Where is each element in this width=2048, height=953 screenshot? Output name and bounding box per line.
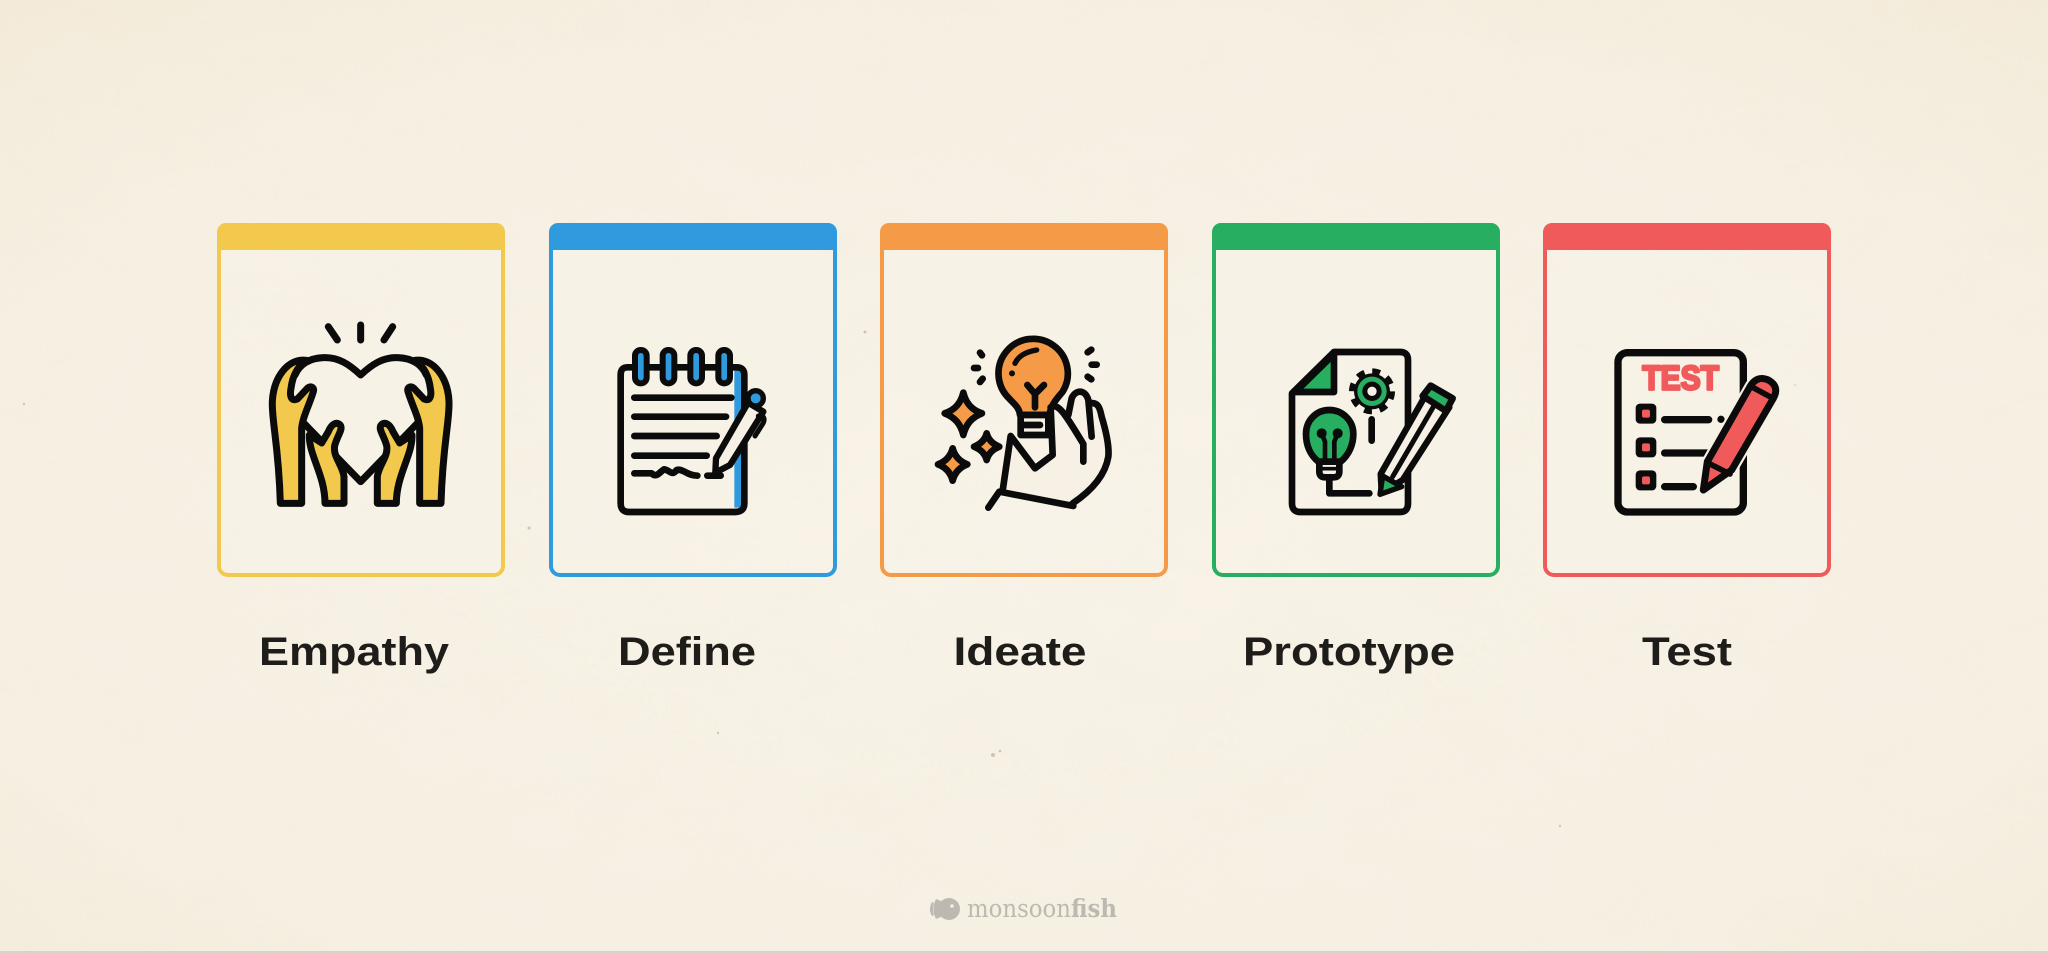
- icon: test checklist and pencil: TEST: [1642, 360, 1719, 398]
- Test card frame: [1545, 225, 1829, 575]
- icon: hand holding light bulb: [938, 339, 1109, 508]
- label: Define: Define: [618, 630, 756, 674]
- icon: notepad and pen: [621, 350, 764, 512]
- panel: Empathy: [217, 223, 505, 674]
- panel: Test: [1543, 223, 1831, 674]
- logo: monsoonfish: [930, 894, 1117, 923]
- Prototype card header: [1212, 223, 1500, 250]
- label: Empathy: Empathy: [259, 630, 450, 674]
- wordmark: monsoonfish: [967, 894, 1117, 923]
- Prototype card frame: [1214, 225, 1498, 575]
- panel: Prototype: [1212, 223, 1500, 674]
- Test card header: [1543, 223, 1831, 250]
- label: Ideate: Ideate: [954, 630, 1086, 674]
- icon: hands holding heart: [272, 325, 449, 503]
- Ideate card header: [880, 223, 1168, 250]
- icon: blueprint document and pencil: [1292, 352, 1453, 512]
- Empathy card frame: [219, 225, 503, 575]
- icon: fish logo mark: [930, 898, 960, 920]
- panel: Define: [549, 223, 837, 674]
- Empathy card header: [217, 223, 505, 250]
- Ideate card frame: [882, 225, 1166, 575]
- Define card header: [549, 223, 837, 250]
- icon: test checklist and pencil: [1618, 353, 1776, 512]
- Define card frame: [551, 225, 835, 575]
- panel: Ideate: [880, 223, 1168, 674]
- label: Test: Test: [1642, 630, 1732, 674]
- label: Prototype: Prototype: [1243, 630, 1455, 674]
